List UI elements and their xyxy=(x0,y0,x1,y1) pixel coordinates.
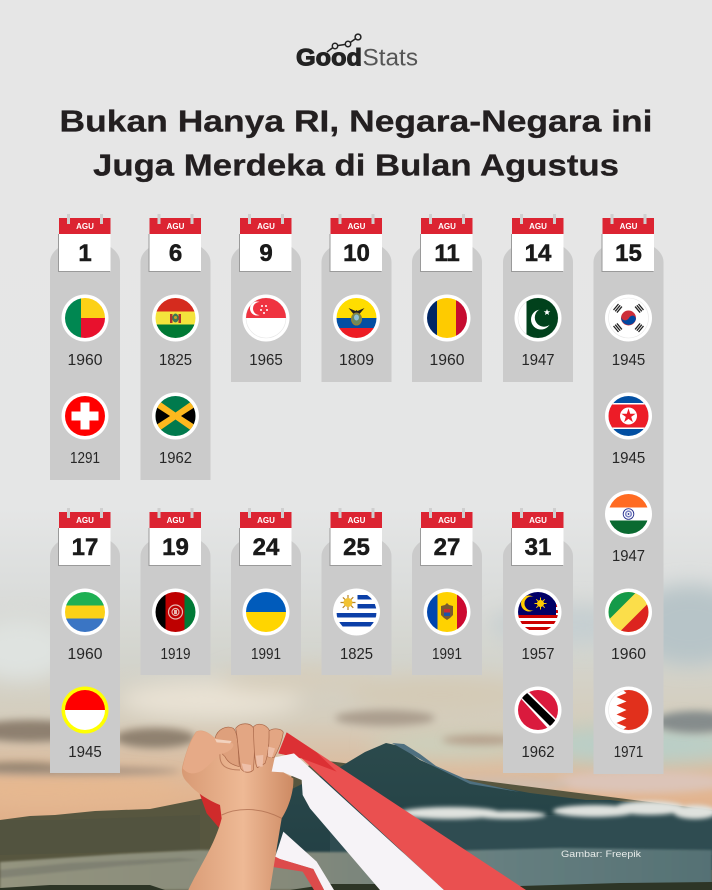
column: 27 Agustus xyxy=(412,508,482,675)
calendar: 24: 24 xyxy=(253,534,280,561)
flag: Republic of the Congo xyxy=(605,588,652,636)
calendar: 25: 25 xyxy=(343,534,370,561)
title: Juga Merdeka di Bulan Agustus xyxy=(93,148,619,183)
logo: GoodStats: Good xyxy=(296,44,362,72)
column: 11 Agustus xyxy=(412,214,482,382)
calendar: 9 xyxy=(239,214,292,272)
calendar: 1 xyxy=(58,214,110,272)
flag: Bahrain xyxy=(605,686,652,734)
calendar: 31: AGU xyxy=(529,516,547,525)
ribbon: main band xyxy=(252,732,526,890)
calendar: 17: AGU xyxy=(76,516,94,525)
flag: Pakistan xyxy=(514,294,562,342)
column: 6 Agustus xyxy=(140,214,210,480)
hand holding red and white ribbon xyxy=(182,724,526,890)
year: 1960 xyxy=(68,646,103,663)
column: 14 Agustus xyxy=(503,214,573,382)
thumb xyxy=(183,731,233,773)
year: 1825 xyxy=(159,352,192,369)
far ridge xyxy=(0,760,712,890)
calendar: 31: 31 xyxy=(525,534,551,561)
logo: GoodStats xyxy=(296,34,418,72)
image credit: Gambar: Freepik xyxy=(561,849,641,860)
calendar: 24 xyxy=(239,508,292,566)
flag: Malaysia xyxy=(514,588,562,636)
calendar: 15 xyxy=(602,214,654,272)
calendar: 19: AGU xyxy=(167,516,185,525)
year: 1809 xyxy=(339,352,374,369)
calendar: 19 xyxy=(148,508,201,566)
calendar: 15: 15 xyxy=(615,240,642,267)
lake xyxy=(0,848,712,890)
column: 17 Agustus xyxy=(50,508,120,773)
flag: Gabon xyxy=(62,588,108,636)
calendar: 14 xyxy=(511,214,564,272)
year: 1947 xyxy=(522,352,554,369)
calendar: 10: AGU xyxy=(348,222,366,231)
flag: Singapore xyxy=(242,294,290,342)
column: 1 Agustus xyxy=(50,214,120,480)
calendar: 27 xyxy=(420,508,472,566)
year: 1947 xyxy=(612,548,645,565)
title xyxy=(60,104,652,183)
flag: Chad xyxy=(424,294,470,342)
calendar: 24: AGU xyxy=(257,516,275,525)
year: 1991 xyxy=(251,646,281,663)
calendar: 9: 9 xyxy=(259,240,273,267)
logo: GoodStats: Stats xyxy=(362,44,418,72)
column: 9 Agustus xyxy=(231,214,301,382)
calendar: 6: 6 xyxy=(169,240,182,267)
calendar: 10: 10 xyxy=(343,240,370,267)
year: 1962 xyxy=(522,744,554,761)
calendar: 17 xyxy=(58,508,110,566)
flag: Bolivia xyxy=(152,294,199,342)
hand and forearm xyxy=(182,724,293,890)
flag: North Korea xyxy=(605,392,652,440)
column: 31 Agustus xyxy=(503,508,573,773)
year: 1291 xyxy=(70,450,100,467)
flag: South Korea xyxy=(605,294,652,342)
flag: Afghanistan xyxy=(152,588,199,636)
calendar: 10 xyxy=(330,214,382,272)
year: 1945 xyxy=(68,744,102,761)
flag: Uruguay xyxy=(333,588,380,636)
calendar: 1: AGU xyxy=(76,222,94,231)
flag: Indonesia xyxy=(62,686,108,734)
fingers xyxy=(215,727,239,767)
volcano xyxy=(270,743,712,870)
year: 1962 xyxy=(159,450,192,467)
flag: Jamaica xyxy=(152,392,199,440)
flag: Benin xyxy=(62,294,108,342)
year: 1971 xyxy=(614,744,643,761)
dark water band xyxy=(330,815,712,855)
calendar: 14: AGU xyxy=(529,222,547,231)
shoreline xyxy=(0,882,712,890)
year: 1960 xyxy=(68,352,103,369)
year: 1957 xyxy=(522,646,554,663)
year: 1991 xyxy=(432,646,462,663)
calendar: 11: AGU xyxy=(438,222,456,231)
calendar: 17: 17 xyxy=(72,534,98,561)
calendar: 27: 27 xyxy=(434,534,460,561)
title: Bukan Hanya RI, Negara-Negara ini xyxy=(60,104,652,139)
year: 1965 xyxy=(249,352,283,369)
column: 25 Agustus xyxy=(322,508,392,675)
flag: Switzerland xyxy=(62,392,108,440)
calendar: 6 xyxy=(148,214,201,272)
year: 1960 xyxy=(611,646,646,663)
calendar: 25: AGU xyxy=(348,516,366,525)
calendar: 14: 14 xyxy=(525,240,552,267)
calendar: 11: 11 xyxy=(434,240,460,267)
calendar: 15: AGU xyxy=(620,222,638,231)
flag: Ecuador xyxy=(333,294,380,342)
flag: Ukraine xyxy=(242,588,290,636)
column: 10 Agustus xyxy=(322,214,392,382)
calendar: 27: AGU xyxy=(438,516,456,525)
year: 1825 xyxy=(340,646,373,663)
column: 19 Agustus xyxy=(140,508,210,675)
white clouds xyxy=(400,801,712,819)
calendar: 9: AGU xyxy=(257,222,275,231)
year: 1960 xyxy=(430,352,465,369)
calendar: 31 xyxy=(511,508,564,566)
calendar: 25 xyxy=(330,508,382,566)
year: 1945 xyxy=(612,352,646,369)
calendar: 1: 1 xyxy=(78,240,92,267)
column: 15 Agustus xyxy=(594,214,664,774)
calendar: 19: 19 xyxy=(162,534,189,561)
year: 1945 xyxy=(612,450,646,467)
flag: Trinidad and Tobago xyxy=(514,686,562,734)
flag: India xyxy=(605,490,652,538)
calendar: 11 xyxy=(420,214,472,272)
ribbon: back tail xyxy=(198,755,334,890)
calendar: 6: AGU xyxy=(167,222,185,231)
flag: Moldova xyxy=(424,588,470,636)
year: 1919 xyxy=(160,646,190,663)
column: 24 Agustus xyxy=(231,508,301,675)
